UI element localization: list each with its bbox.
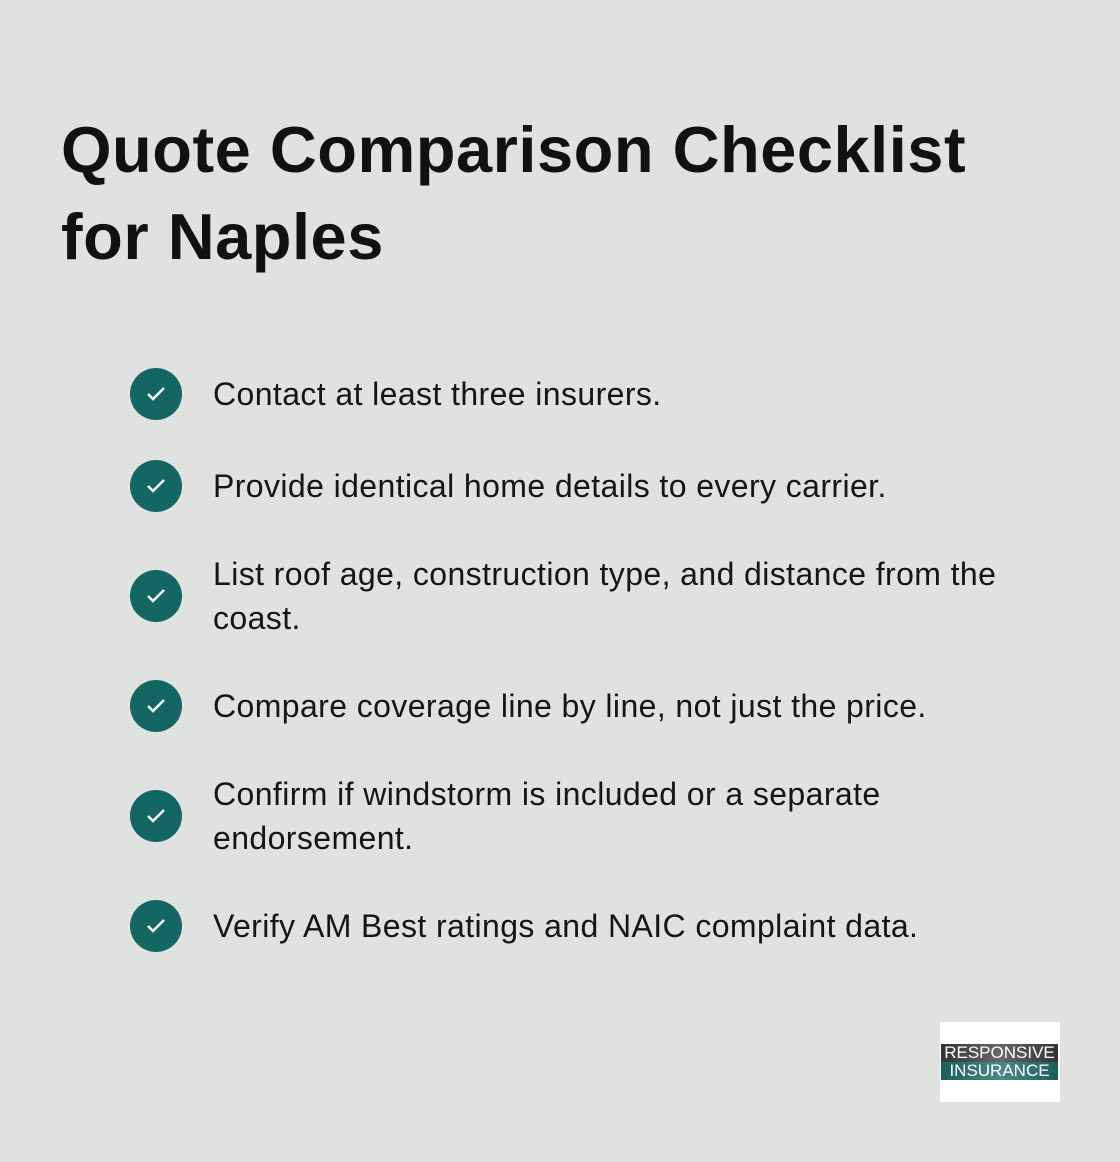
item 3: List roof age, construction type, and distance from the coast. [213,556,996,636]
title: Quote Comparison Checklist [61,113,966,186]
title: for Naples [61,200,384,273]
item 6: Verify AM Best ratings and NAIC complaint data. [213,908,918,944]
item 2 [130,460,887,512]
title [61,113,966,273]
item 4: Compare coverage line by line, not just the price. [213,688,927,724]
item 1: Contact at least three insurers. [213,376,662,412]
item 5: Confirm if windstorm is included or a separate endorsement. [213,776,881,856]
item 4 [130,680,927,732]
logo: RESPONSIVE [944,1043,1055,1062]
logo [940,1022,1060,1102]
item 6 [130,900,918,952]
item 2: Provide identical home details to every carrier. [213,468,887,504]
item 1 [130,368,662,420]
logo: INSURANCE [949,1061,1050,1080]
